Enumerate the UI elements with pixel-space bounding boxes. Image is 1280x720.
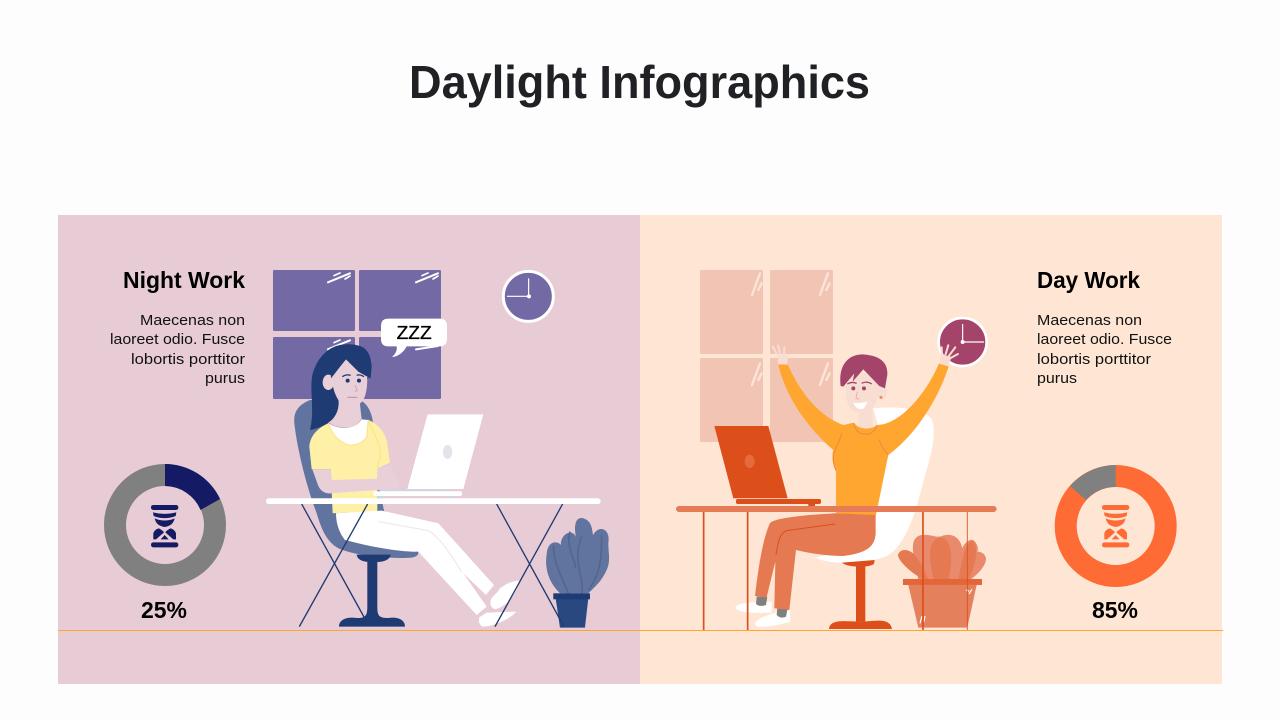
illustration: night work scene xyxy=(266,270,609,628)
chair: day xyxy=(816,407,934,629)
text block: day work description: purus xyxy=(1037,370,1077,387)
text block: night work description: purus xyxy=(205,370,245,387)
text block: day work description: Maecenas non xyxy=(1037,312,1142,329)
text block: day work description: lobortis porttitor xyxy=(1037,351,1151,368)
hand: left raised xyxy=(773,345,788,364)
heading: day work: Day Work xyxy=(1037,267,1140,293)
clock: night xyxy=(503,271,553,321)
person: day worker xyxy=(735,345,958,627)
heading: night work: Night Work xyxy=(123,267,245,293)
clock: day xyxy=(939,318,987,366)
person: night worker xyxy=(309,344,519,627)
speech bubble: ZZZ: ZZZ xyxy=(397,322,432,343)
panel: day work xyxy=(640,215,1222,684)
speech bubble: ZZZ xyxy=(381,319,447,357)
donut chart: night work 25% xyxy=(115,464,220,575)
label: 25%: 25% xyxy=(141,597,187,623)
laptop: night xyxy=(373,414,483,498)
text block: day work description: laoreet odio. Fusce xyxy=(1037,331,1172,348)
text block: night work description: Maecenas non xyxy=(140,312,245,329)
plant: night xyxy=(546,518,609,628)
title: Daylight Infographics xyxy=(409,56,870,108)
baseline: floor line xyxy=(58,630,1223,631)
window: night xyxy=(273,270,441,399)
desk: night xyxy=(266,498,601,627)
icon: night hourglass xyxy=(151,505,178,547)
text block: night work description xyxy=(110,312,245,387)
illustration: day work scene xyxy=(676,270,997,630)
text block: night work description: laoreet odio. Fusce xyxy=(110,331,245,348)
window: day xyxy=(700,270,833,442)
donut chart: day work 85% xyxy=(1066,465,1166,576)
chair: night xyxy=(294,400,418,627)
panel: night work xyxy=(58,215,640,684)
plant: day xyxy=(898,535,986,628)
laptop: day xyxy=(714,426,821,506)
text block: night work description: lobortis porttitor xyxy=(131,351,245,368)
label: 85%: 85% xyxy=(1092,597,1138,623)
desk: day xyxy=(676,506,997,630)
text block: day work description xyxy=(1037,312,1172,387)
hand: right raised xyxy=(940,345,958,365)
icon: day hourglass xyxy=(1102,505,1129,547)
